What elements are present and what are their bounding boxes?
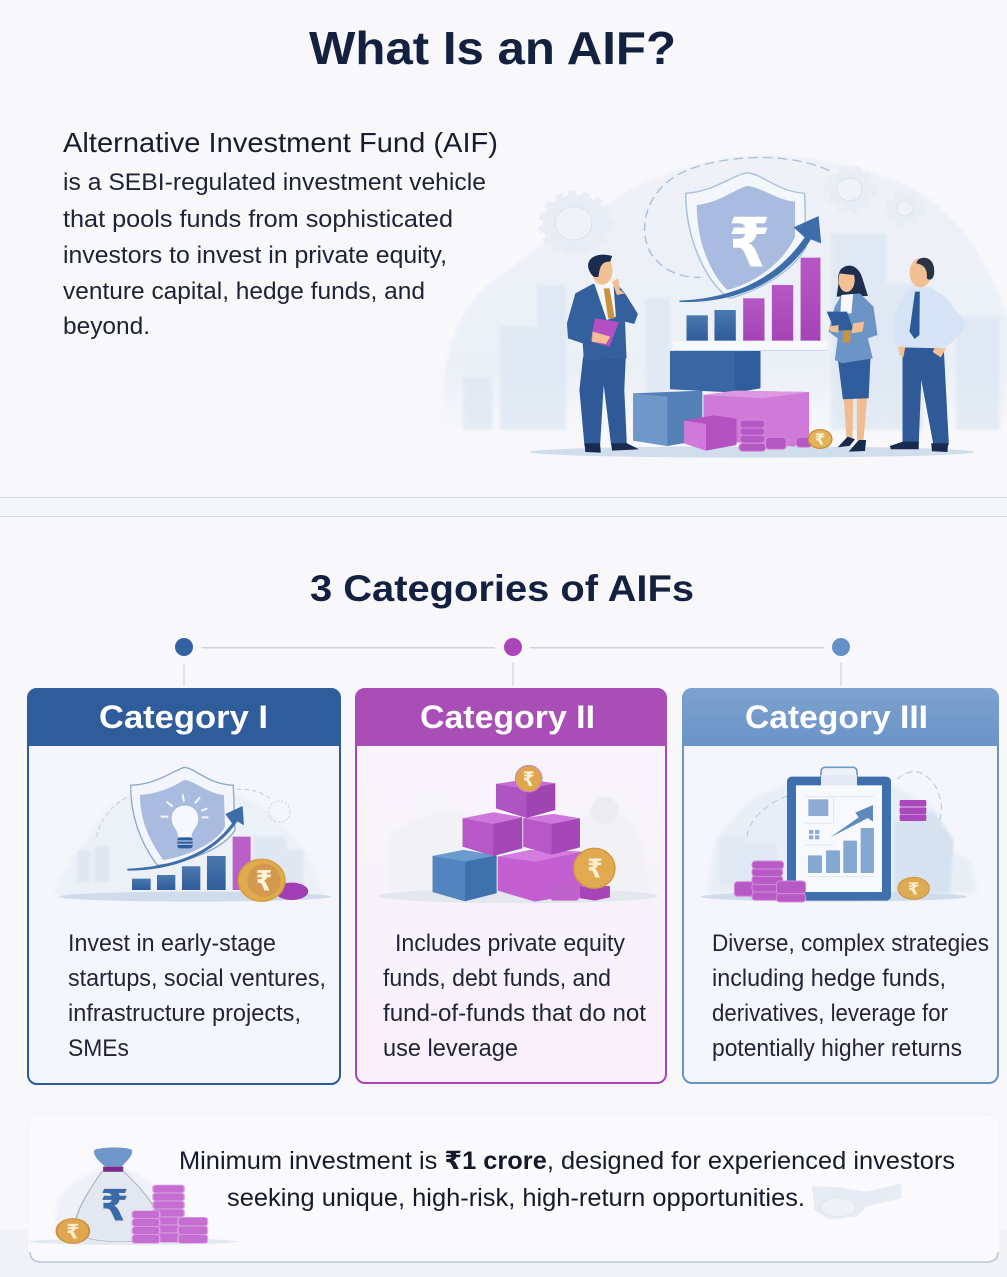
- card text: Category I: infrastructure projects,: [68, 1000, 301, 1027]
- man with tablet: [567, 255, 639, 453]
- card header: Category III: [682, 688, 999, 746]
- card text: Category III: [712, 930, 989, 1062]
- panel: Category II: [355, 688, 667, 1083]
- title: What Is an AIF?: [309, 22, 676, 74]
- bars: [673, 258, 827, 351]
- card text: Category III: derivatives, leverage for: [712, 1000, 948, 1027]
- background buildings: [463, 233, 1000, 430]
- text block: AIF definition: that pools funds from sophisticated: [63, 206, 453, 233]
- card text: Category II: Includes private equity: [395, 930, 625, 957]
- timeline connector: [175, 638, 850, 686]
- card text: Category I: SMEs: [68, 1035, 129, 1062]
- icon: shield with bulb and growth chart: [55, 767, 332, 902]
- panel: Category III: [682, 688, 999, 1083]
- ground: [529, 446, 975, 458]
- icon: money bag with coins: ₹: [100, 1181, 129, 1231]
- text block: AIF definition: [63, 127, 498, 340]
- decorative handshake icon: [812, 1183, 901, 1219]
- icon: shield with bulb and growth chart: ₹: [256, 866, 272, 898]
- card text: Category II: funds, debt funds, and: [383, 965, 611, 992]
- banner text: [179, 1147, 955, 1212]
- icon: money bag with coins: [29, 1147, 237, 1245]
- card text: Category I: [68, 930, 326, 1062]
- text block: AIF definition: venture capital, hedge funds, and: [63, 278, 425, 305]
- woman with tablet: [827, 266, 877, 452]
- man with blue tie: [890, 258, 966, 452]
- card text: Category III: potentially higher returns: [712, 1035, 962, 1062]
- card title: Category III: Category III: [745, 699, 928, 735]
- card title: Category I: Category I: [99, 699, 268, 735]
- icon: stacked cubes with coins: [378, 765, 658, 903]
- card text: Category I: Invest in early-stage: [68, 930, 276, 957]
- card text: Category II: use leverage: [383, 1035, 518, 1062]
- icon: money bag with coins: ₹: [66, 1220, 79, 1243]
- coin stacks: [739, 420, 812, 451]
- card title: Category II: Category II: [420, 699, 595, 735]
- icon: stacked cubes with coins: ₹: [587, 854, 603, 884]
- illustration: investors, shield, growth chart and boxes: [441, 155, 1007, 458]
- section heading: 3 Categories of AIFs: [310, 568, 694, 609]
- panel: Category I: [27, 688, 341, 1084]
- text block: AIF definition: investors to invest in private equity,: [63, 242, 447, 269]
- card text: Category II: [383, 930, 646, 1062]
- text block: AIF definition: beyond.: [63, 313, 150, 340]
- panel: minimum investment banner: [28, 1114, 1000, 1262]
- icon: clipboard report with coins: ₹: [908, 879, 919, 898]
- card text: Category I: startups, social ventures,: [68, 965, 326, 992]
- dashed orbit: [645, 158, 829, 277]
- growth arrow: [680, 216, 821, 302]
- card text: Category II: fund-of-funds that do not: [383, 1000, 646, 1027]
- icon: stacked cubes with coins: ₹: [523, 769, 535, 791]
- icon: clipboard report with coins: [700, 767, 977, 902]
- gears: [543, 170, 921, 253]
- gold coin: [808, 430, 832, 449]
- text block: AIF definition: is a SEBI-regulated investment vehicle: [63, 169, 486, 196]
- shield: [686, 173, 806, 298]
- card header: Category II: [355, 688, 667, 746]
- background hill: [441, 155, 1007, 430]
- banner text: Minimum investment is ₹1 crore, designed for experienced investors: [179, 1147, 955, 1175]
- card text: Category III: Diverse, complex strategies: [712, 930, 989, 957]
- boxes: [633, 351, 809, 451]
- banner text: seeking unique, high-risk, high-return opportunities.: [227, 1184, 805, 1212]
- rupee symbol: ₹: [728, 204, 770, 284]
- card text: Category III: including hedge funds,: [712, 965, 946, 992]
- gold coin: ₹: [815, 431, 825, 449]
- card header: Category I: [27, 688, 341, 746]
- text block: AIF definition: Alternative Investment Fund (AIF): [63, 127, 498, 158]
